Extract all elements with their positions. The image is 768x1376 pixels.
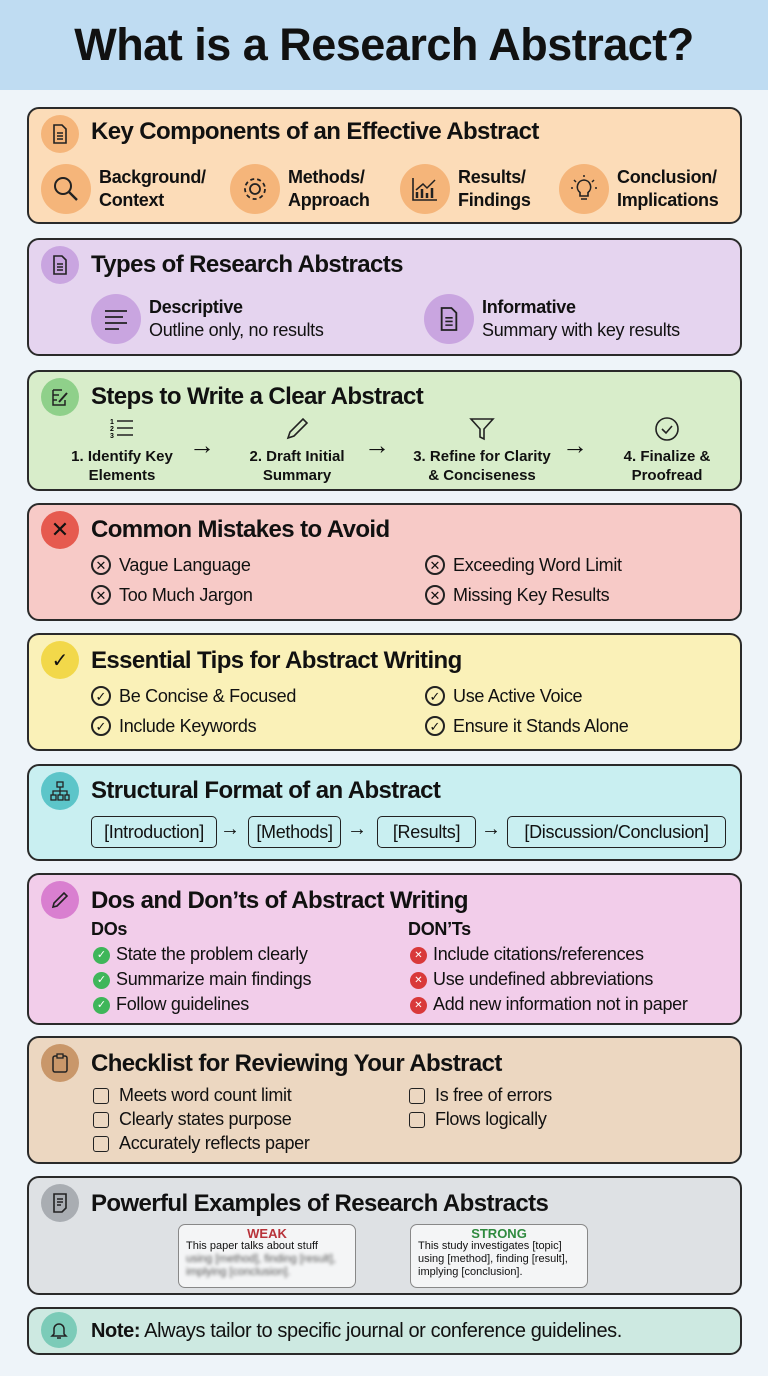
weak example: This paper talks about stuff [186, 1240, 318, 1252]
step 4: 4. Finalize & [624, 448, 710, 465]
step 4 [624, 417, 710, 484]
item: background: Background/ [99, 167, 206, 187]
list: Ensure it Stands Alone [453, 716, 629, 736]
item: methods: Methods/ [288, 167, 365, 187]
icon: check [41, 641, 79, 679]
list: Missing Key Results [453, 585, 609, 605]
step 3 [413, 418, 551, 484]
heading: Key Components of an Effective Abstract [91, 118, 539, 145]
panel: note [27, 1307, 742, 1355]
arrow: → [189, 430, 215, 460]
flow: [Results] [393, 822, 460, 842]
list [91, 555, 622, 605]
item: descriptive: Outline only, no results [149, 320, 324, 340]
step 1 [71, 419, 173, 484]
item: results [400, 164, 531, 214]
strong example [410, 1224, 588, 1288]
title banner [0, 0, 768, 90]
note text: Note: Always tailor to specific journal or conference guidelines. [91, 1320, 622, 1342]
step 1: 1. Identify Key [71, 448, 173, 465]
list: ✕ [430, 558, 440, 572]
panel: structure [27, 764, 742, 861]
step 1: 1 [110, 419, 114, 426]
icon: x: ✕ [51, 517, 69, 542]
step 2: 2. Draft Initial [249, 448, 345, 465]
list: ✕ [96, 588, 106, 602]
strong example: This study investigates [topic] [418, 1240, 562, 1252]
panel: types [27, 238, 742, 356]
weak example: implying [conclusion]. [186, 1266, 291, 1278]
list: Clearly states purpose [119, 1109, 292, 1129]
step 4: Proofread [632, 467, 702, 484]
item: descriptive: Descriptive [149, 297, 243, 317]
list: ✓ [96, 718, 106, 734]
panel: steps [27, 370, 742, 491]
item: results: Findings [458, 190, 531, 210]
flow [91, 816, 726, 848]
heading: Steps to Write a Clear Abstract [91, 383, 423, 410]
heading: Checklist for Reviewing Your Abstract [91, 1050, 502, 1077]
icon: bell [41, 1312, 77, 1348]
list: Use Active Voice [453, 686, 582, 706]
item: informative: Summary with key results [482, 320, 680, 340]
list: ✕ [96, 558, 106, 572]
panel: examples [27, 1176, 742, 1295]
item: informative: Informative [482, 297, 576, 317]
list: ✓ [430, 718, 440, 734]
title banner: What is a Research Abstract? [74, 19, 694, 70]
strong example: using [method], finding [result], [418, 1253, 568, 1265]
dos column: ✓ [97, 974, 106, 986]
step 3: 3. Refine for Clarity [413, 448, 551, 465]
dos column: ✓ [97, 999, 106, 1011]
step 1: 2 [110, 426, 114, 433]
arrow: → [364, 430, 390, 460]
icon: document [41, 115, 79, 153]
icon: x [41, 511, 79, 549]
dos column: DOs [91, 919, 127, 939]
item: conclusion [559, 164, 718, 214]
item: methods: Approach [288, 190, 370, 210]
icon: clipboard [41, 1044, 79, 1082]
flow: → [220, 818, 240, 840]
list: Be Concise & Focused [119, 686, 296, 706]
list: ✓ [96, 688, 106, 704]
icon: pencil [41, 881, 79, 919]
dos column: Follow guidelines [116, 994, 249, 1014]
list: Include Keywords [119, 716, 256, 736]
dos column [91, 919, 311, 1014]
strong example: implying [conclusion]. [418, 1266, 523, 1278]
dos column: ✓ [97, 949, 106, 961]
weak example [178, 1224, 356, 1288]
panel: tips [27, 633, 742, 751]
panel: checklist [27, 1036, 742, 1164]
item: background [41, 164, 206, 214]
heading: Powerful Examples of Research Abstracts [91, 1190, 548, 1217]
heading: Structural Format of an Abstract [91, 777, 440, 804]
heading: Essential Tips for Abstract Writing [91, 647, 462, 674]
step 2 [249, 418, 345, 484]
weak example: WEAK [247, 1226, 287, 1241]
heading: Types of Research Abstracts [91, 251, 403, 278]
panel: mistakes [27, 503, 742, 621]
item: results: Results/ [458, 167, 526, 187]
strong example: STRONG [471, 1226, 527, 1241]
list: ✕ [430, 588, 440, 602]
icon: check: ✓ [52, 650, 68, 672]
flow: → [481, 818, 501, 840]
step 1: Elements [89, 467, 155, 484]
flow: → [347, 818, 367, 840]
item: background: Context [99, 190, 164, 210]
item: conclusion: Conclusion/ [617, 167, 717, 187]
step 3: & Conciseness [428, 467, 536, 484]
donts column: ✕ [414, 950, 423, 960]
list: Is free of errors [435, 1085, 552, 1105]
list [93, 1085, 552, 1153]
step 2: Summary [263, 467, 331, 484]
icon: document [41, 246, 79, 284]
step 1: 3 [110, 433, 114, 440]
heading: Common Mistakes to Avoid [91, 516, 390, 543]
dos column: State the problem clearly [116, 944, 308, 964]
weak example: using [method], finding [result], [186, 1253, 336, 1265]
flow: [Discussion/Conclusion] [524, 822, 709, 842]
donts column: ✕ [414, 1000, 423, 1010]
donts column: Use undefined abbreviations [433, 969, 653, 989]
item: informative [424, 294, 680, 344]
donts column: Include citations/references [433, 944, 644, 964]
donts column: ✕ [414, 974, 423, 986]
icon: document [41, 1184, 79, 1222]
heading: Dos and Don’ts of Abstract Writing [91, 887, 468, 914]
panel: dos and donts [27, 873, 742, 1025]
icon: edit [41, 378, 79, 416]
item: descriptive [91, 294, 324, 344]
dos column: Summarize main findings [116, 969, 311, 989]
flow: [Introduction] [104, 822, 204, 842]
item: methods [230, 164, 370, 214]
list: Vague Language [119, 555, 251, 575]
donts column: DON’Ts [408, 919, 471, 939]
icon: hierarchy [41, 772, 79, 810]
donts column: Add new information not in paper [433, 994, 688, 1014]
list: Accurately reflects paper [119, 1133, 310, 1153]
list: Flows logically [435, 1109, 547, 1129]
donts column [408, 919, 688, 1014]
arrow: → [562, 430, 588, 460]
panel: key components [27, 107, 742, 224]
item: conclusion: Implications [617, 190, 718, 210]
list: ✓ [430, 688, 440, 704]
flow: [Methods] [256, 822, 333, 842]
list [91, 686, 629, 736]
list: Meets word count limit [119, 1085, 291, 1105]
list: Too Much Jargon [119, 585, 253, 605]
list: Exceeding Word Limit [453, 555, 622, 575]
